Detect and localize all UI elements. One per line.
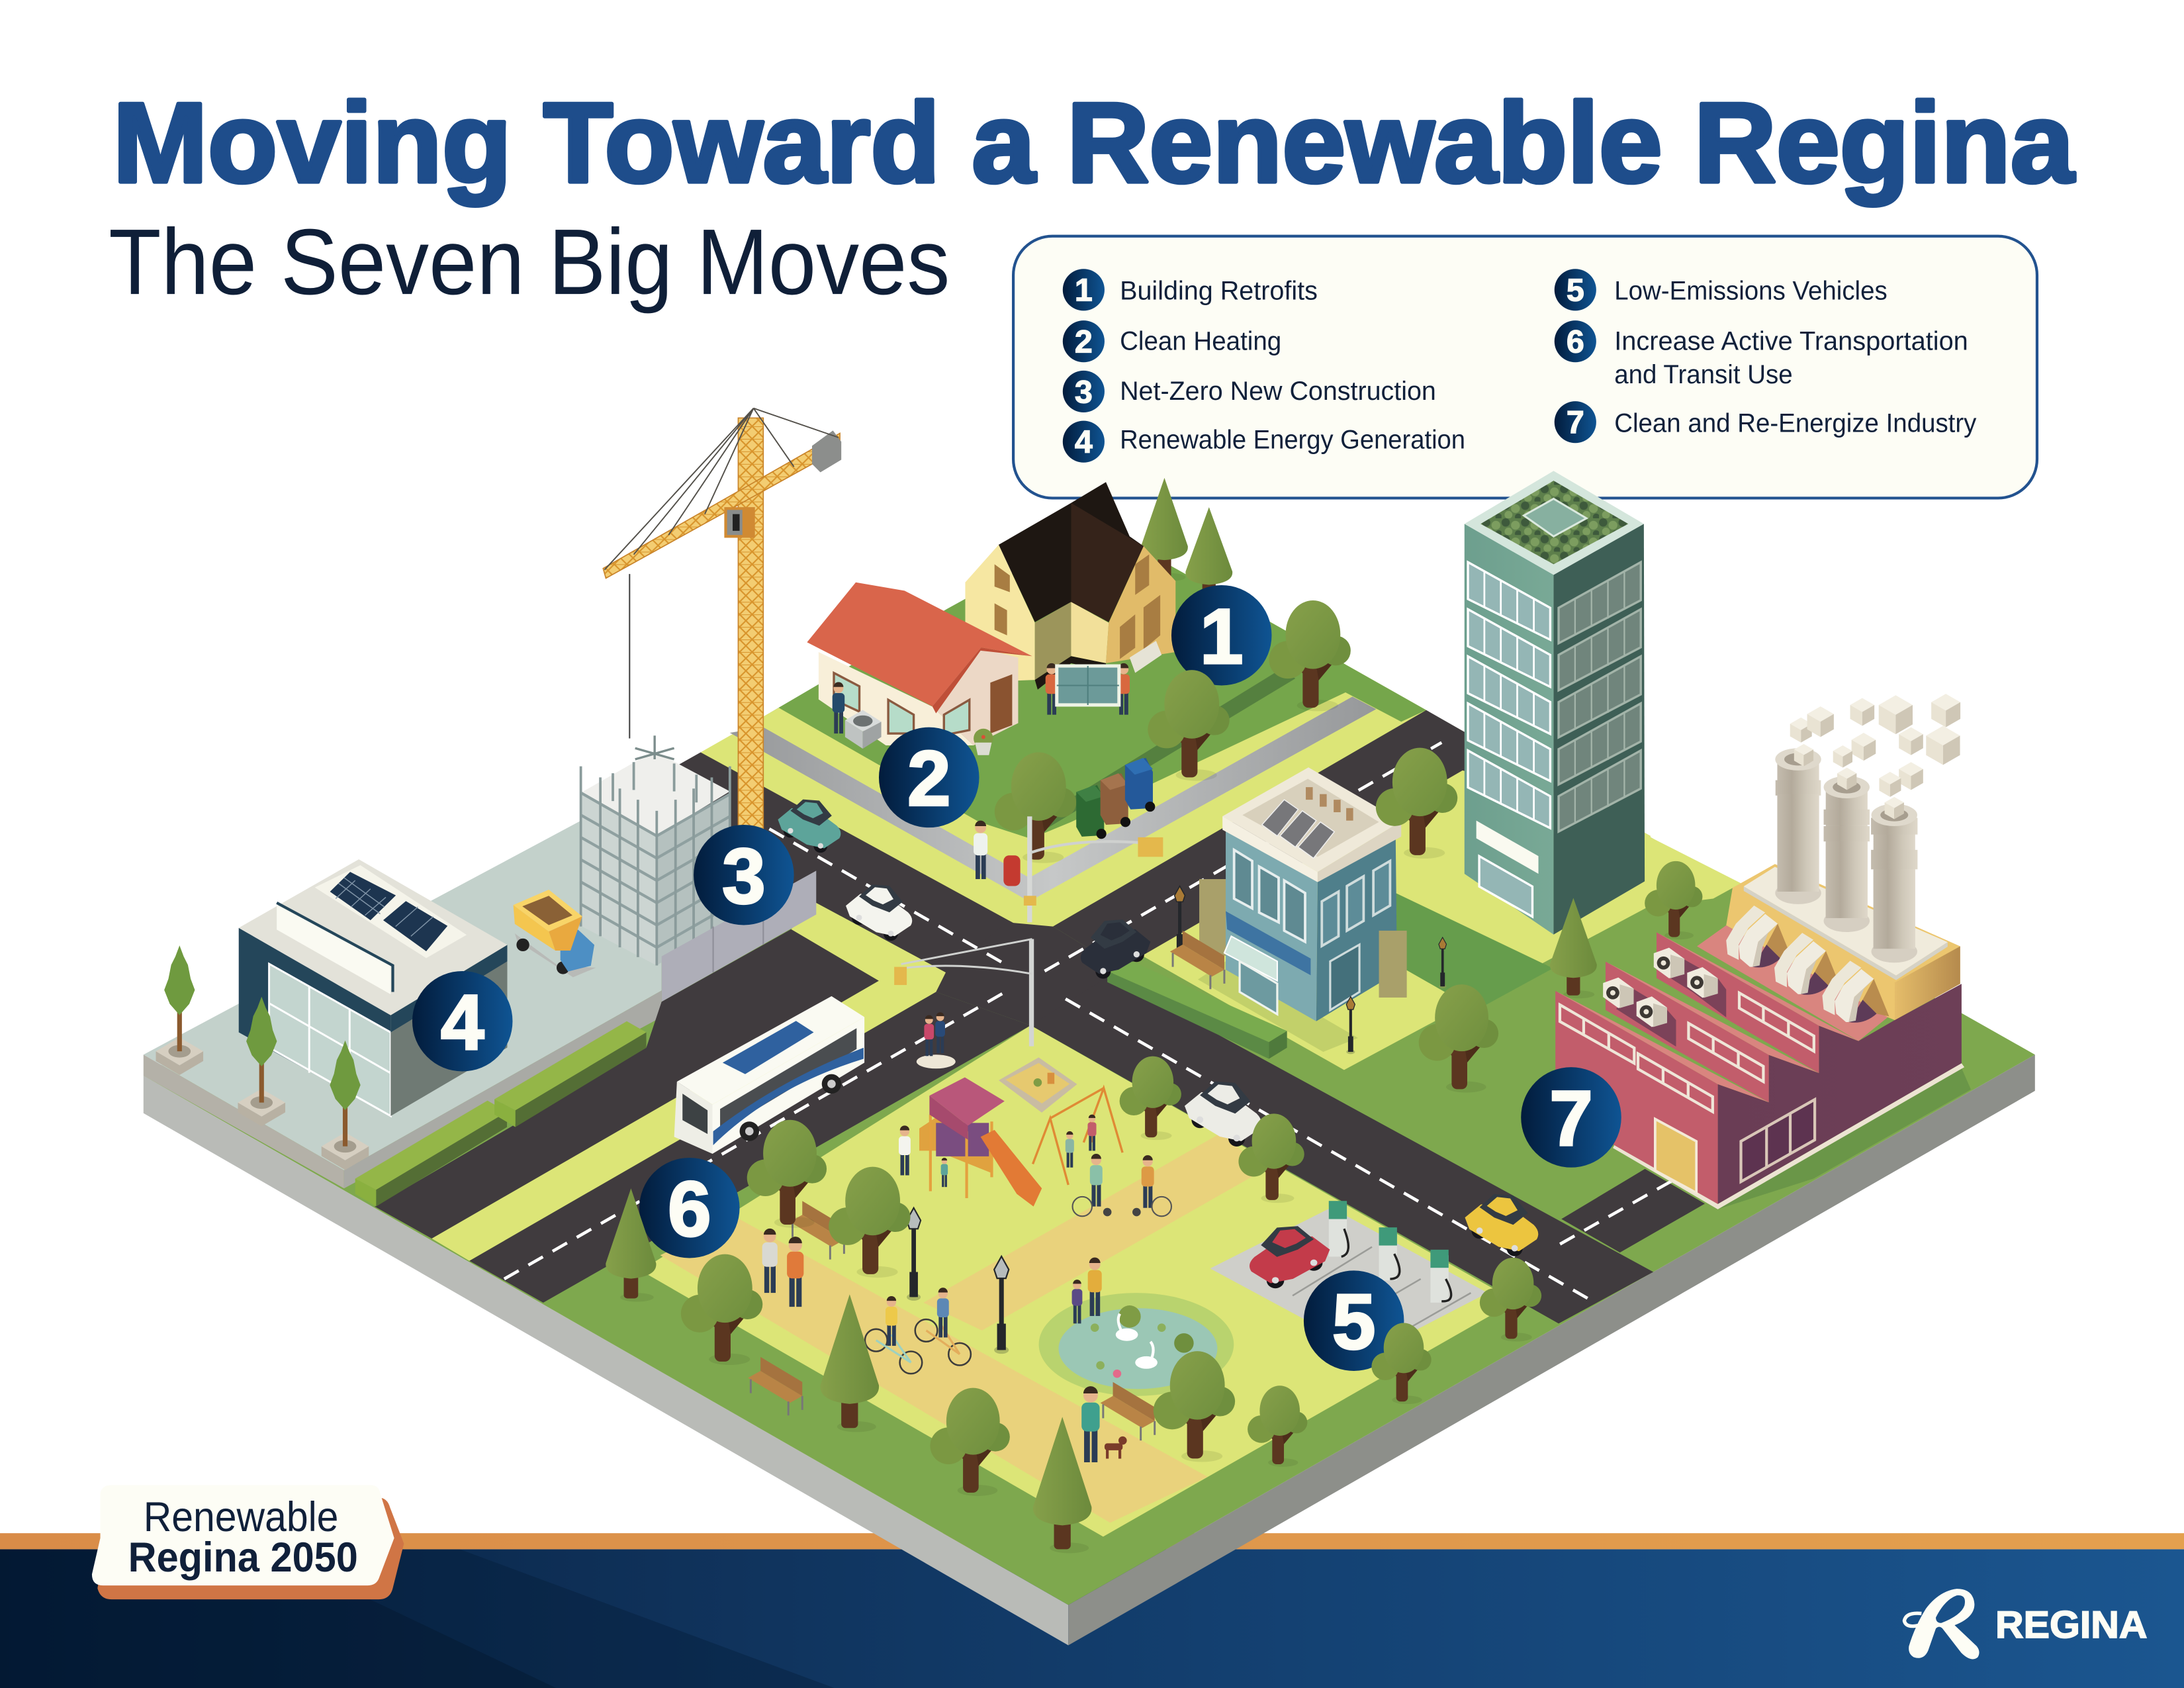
person by heat pump <box>833 682 844 733</box>
footer band <box>0 1533 2184 1688</box>
legend item 5: Low-Emissions Vehicles <box>1614 277 1888 306</box>
hedges <box>355 1021 647 1207</box>
wall air conditioners <box>1603 948 1718 1027</box>
legend item 4: Renewable Energy Generation <box>1120 426 1465 455</box>
legend item 7: Clean and Re-Energize Industry <box>1614 408 1976 438</box>
number marker 6: 6 <box>668 1165 711 1252</box>
cars <box>778 800 1538 1256</box>
number marker 5: 5 <box>1332 1278 1375 1365</box>
legend item 3 <box>1063 371 1436 412</box>
number marker 3: 3 <box>722 832 766 919</box>
striped shop awning <box>1224 936 1277 981</box>
swing set <box>1033 1088 1122 1185</box>
badge: Renewable Regina 2050: Renewable <box>144 1494 338 1540</box>
legend item 1: 1 <box>1075 273 1093 308</box>
legend item 6 <box>1555 320 1968 389</box>
number marker 4: 4 <box>441 978 484 1066</box>
factory door <box>1655 1119 1696 1193</box>
smoke stacks <box>1775 748 1917 962</box>
heat pump unit <box>845 710 882 749</box>
hedge by blue building <box>1107 959 1287 1059</box>
crane <box>603 408 841 829</box>
mailbox <box>1003 855 1021 886</box>
park trees <box>681 1056 1541 1553</box>
EV chargers <box>1329 1201 1451 1303</box>
legend item 2: 2 <box>1075 324 1093 360</box>
pine over marker 6 <box>606 1188 656 1302</box>
factory <box>1555 694 1964 1209</box>
number marker 4 <box>412 971 512 1071</box>
roof vents <box>1726 906 1889 1023</box>
waste bins <box>1076 758 1155 839</box>
number marker 3 <box>694 825 794 925</box>
block: homes lawn and sidewalk <box>701 525 1426 931</box>
dog <box>1105 1436 1127 1459</box>
tree over marker 1 <box>1148 670 1230 781</box>
number marker 6 <box>639 1158 740 1258</box>
badge: Renewable Regina 2050: Regina 2050 <box>128 1534 358 1581</box>
red electric car <box>1250 1226 1330 1288</box>
net-zero office building with solar roof <box>239 859 507 1116</box>
legend item 1: Building Retrofits <box>1120 277 1318 306</box>
legend item 7: 7 <box>1567 405 1584 441</box>
tree and lamps: right block <box>1175 748 1702 1092</box>
green tower with living roof <box>1465 471 1645 935</box>
house with clean heating <box>807 583 1032 755</box>
swans <box>1116 1314 1158 1369</box>
legend item 6: 6 <box>1567 324 1584 360</box>
bench by building <box>1170 931 1224 989</box>
legend item 7 <box>1555 401 1976 443</box>
planter trees <box>156 945 369 1170</box>
legend item 1 <box>1063 269 1318 310</box>
pond <box>1039 1293 1234 1396</box>
badge: Renewable Regina 2050 <box>92 1485 404 1599</box>
number marker 7: 7 <box>1549 1074 1593 1162</box>
house under retrofit <box>965 482 1175 690</box>
EV charging lot <box>1210 1207 1488 1354</box>
workers carrying a window <box>1046 663 1130 715</box>
clerestory windows <box>1560 993 1814 1112</box>
park lamps <box>907 1208 1009 1354</box>
tree over marker 5 <box>1371 1323 1432 1404</box>
legend item 2 <box>1063 320 1281 362</box>
legend item 6: Increase Active Transportation <box>1614 326 1968 355</box>
number marker 2: 2 <box>907 734 951 821</box>
factory side window <box>1741 1100 1815 1182</box>
playground <box>919 1078 1042 1207</box>
title: Moving Toward a Renewable Regina <box>113 80 2075 207</box>
legend item 4: 4 <box>1075 424 1093 460</box>
number marker 2 <box>879 727 979 827</box>
scooter riders <box>917 1012 956 1068</box>
construction fence <box>662 870 816 1002</box>
number marker 5 <box>1304 1270 1404 1371</box>
legend item 4 <box>1063 421 1465 463</box>
logo: City of Regina <box>1904 1589 2147 1659</box>
number marker 1 <box>1171 585 1271 685</box>
street light at intersection <box>894 939 1034 1047</box>
legend item 2: Clean Heating <box>1120 326 1281 355</box>
park lawn and paths <box>641 1025 1516 1536</box>
block: right side lawns <box>1142 771 1971 1209</box>
rooftop solar panels <box>330 872 447 951</box>
roads <box>375 710 1705 1323</box>
panel: legend of seven big moves <box>1013 236 2037 498</box>
legend item 5 <box>1555 269 1888 310</box>
number marker 1: 1 <box>1200 592 1244 680</box>
block: paved construction lot <box>144 820 662 1188</box>
sandbox <box>999 1057 1077 1113</box>
isometric city base platform <box>144 525 2035 1646</box>
logo: City of Regina: REGINA <box>1995 1604 2147 1646</box>
street light at sidewalk corner <box>1024 816 1163 922</box>
subtitle: The Seven Big Moves <box>109 209 950 314</box>
pine trees behind house <box>1141 478 1232 605</box>
legend item 6: and Transit Use <box>1614 360 1793 389</box>
legend item 3: Net-Zero New Construction <box>1120 377 1436 406</box>
mail carrier <box>974 821 987 879</box>
legend item 5: 5 <box>1567 273 1584 308</box>
rooftop greenery <box>1480 481 1628 564</box>
cyclists <box>865 1288 971 1374</box>
wheelchair users <box>1073 1154 1171 1216</box>
number marker 7 <box>1521 1067 1621 1168</box>
park people <box>762 1125 1102 1462</box>
bus <box>674 996 864 1154</box>
cube smoke <box>1790 694 1960 820</box>
park benches <box>748 1201 1155 1440</box>
building under construction <box>581 735 730 966</box>
dump truck <box>514 890 596 977</box>
blue mixed-use building <box>1199 767 1407 1021</box>
tree row: homes block <box>995 600 1351 863</box>
legend item 3: 3 <box>1075 374 1093 410</box>
flower pot <box>974 729 993 755</box>
